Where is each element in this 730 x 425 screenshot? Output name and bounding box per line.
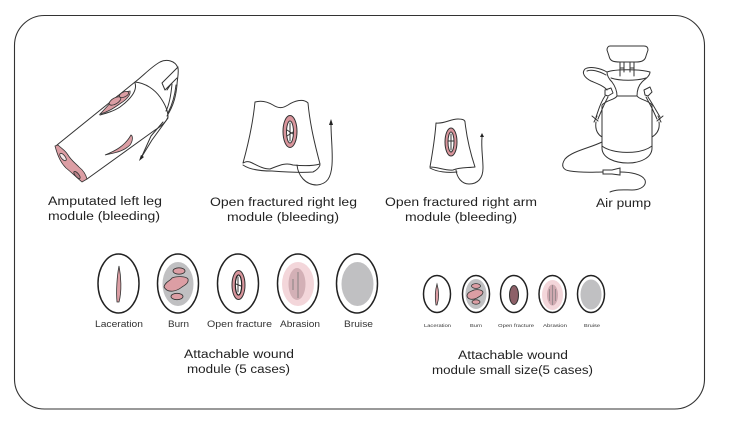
small wound card: open fracture: Open fracture — [498, 323, 535, 328]
attachable wound module small size set — [424, 276, 604, 328]
wound card: open fracture: Open fracture — [207, 319, 272, 330]
small wound card: burn: Burn — [470, 323, 483, 328]
straps — [596, 96, 608, 119]
small wound card: bruise: Bruise — [584, 323, 601, 328]
hose loop — [583, 68, 607, 90]
wound card: bruise — [336, 254, 378, 330]
wound card: abrasion — [278, 254, 320, 330]
wound card: burn: Burn — [168, 319, 189, 330]
wound: side cut — [105, 135, 132, 155]
icon: amputated left leg module — [55, 60, 178, 182]
wound: open fracture — [445, 128, 457, 156]
label: air pump: Air pump — [596, 198, 651, 210]
label: open fractured right leg: Open fractured right leg — [210, 197, 357, 209]
outlet hose — [563, 142, 603, 172]
wound: open fracture — [283, 116, 297, 148]
small wound card: laceration: Laceration — [424, 323, 452, 328]
wound: upper thigh — [100, 91, 130, 114]
small wound card: open fracture — [498, 276, 535, 328]
wound card: abrasion: Abrasion — [280, 319, 320, 330]
label: amputated left leg: module (bleeding) — [48, 211, 160, 223]
label: attachable wound module small size — [432, 350, 593, 377]
wound card: burn — [158, 254, 198, 330]
knobs — [605, 88, 613, 96]
wound card: laceration — [95, 254, 143, 330]
label: attachable wound module small size: Attachable wound — [458, 350, 568, 362]
icon: open fractured right leg module — [243, 100, 333, 185]
wound: amputated stump — [55, 145, 87, 182]
label: open fractured right arm — [385, 197, 537, 224]
icon: air pump — [563, 46, 663, 192]
small wound card: bruise — [578, 276, 604, 328]
wound card: laceration: Laceration — [95, 319, 143, 330]
pump funnel — [607, 70, 650, 96]
label: amputated left leg: Amputated left leg — [48, 196, 162, 208]
attachable wound module set — [95, 254, 378, 330]
small wound card: laceration — [424, 276, 452, 328]
small wound card: abrasion: Abrasion — [543, 323, 568, 328]
label: open fractured right arm: Open fractured right arm — [385, 197, 537, 209]
label: open fractured right leg — [210, 197, 357, 224]
label: open fractured right arm: module (bleeding) — [405, 212, 517, 224]
label: open fractured right leg: module (bleeding) — [227, 212, 339, 224]
label: attachable wound module: module (5 cases) — [187, 364, 290, 376]
icon: open fractured right arm module — [430, 119, 484, 184]
pump body — [602, 96, 652, 163]
small wound card: burn — [462, 276, 490, 328]
small wound card: abrasion — [539, 276, 568, 328]
label: attachable wound module — [184, 349, 294, 376]
label: amputated left leg — [48, 196, 162, 223]
wound card: bruise: Bruise — [344, 319, 373, 330]
pump cap — [607, 46, 648, 62]
wound card: open fracture — [207, 254, 272, 330]
label: attachable wound module small size: module small size(5 cases) — [432, 365, 593, 377]
label: attachable wound module: Attachable wound — [184, 349, 294, 361]
